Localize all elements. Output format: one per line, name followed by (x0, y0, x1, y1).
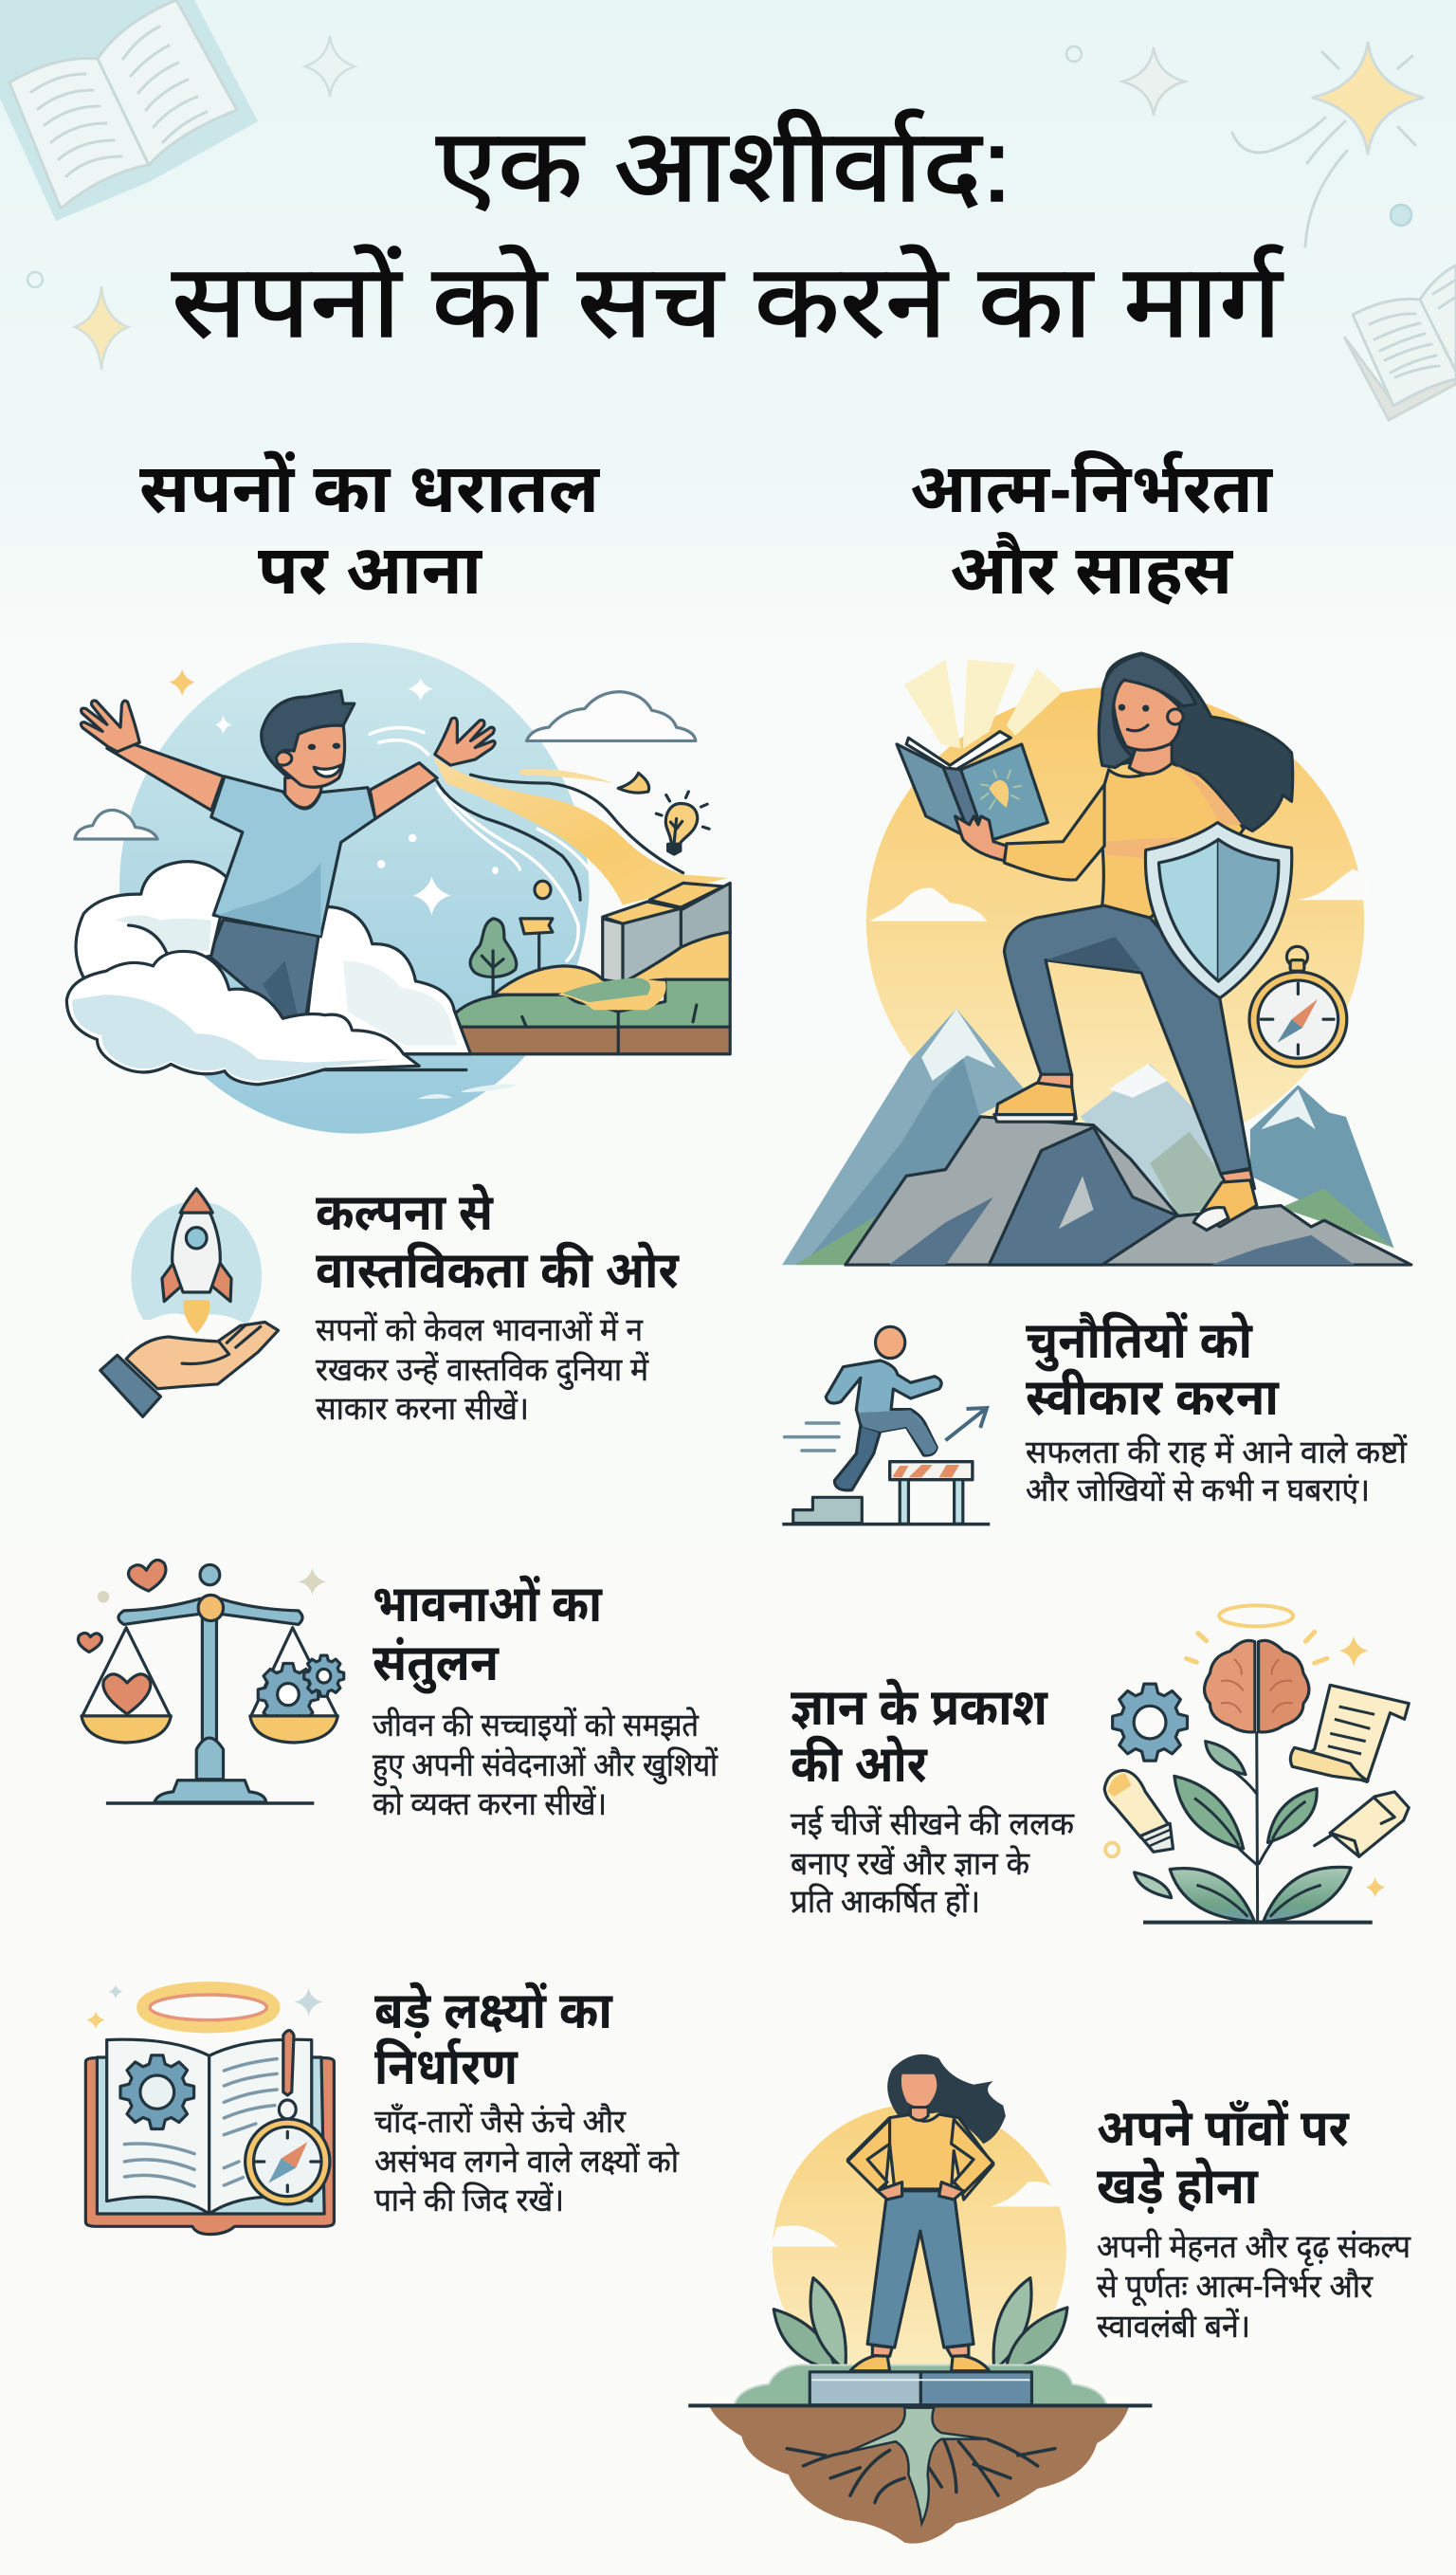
text: accepting challenges: और जोखियों से कभी न घबराएं। (1026, 1471, 1370, 1508)
sun (866, 687, 1364, 1157)
icon: faded open book top left (0, 0, 258, 221)
text: toward the light of knowledge: की ओर (791, 1735, 928, 1793)
text: imagination to reality (316, 1183, 680, 1427)
pen (283, 2031, 294, 2095)
text: setting big goals (374, 1981, 680, 2219)
icon: open book with gear, halo and compass (85, 1984, 334, 2235)
page stacks (97, 2057, 324, 2214)
icon: yellow sparkle (1312, 42, 1424, 155)
base (155, 1738, 266, 1802)
arm (1004, 784, 1104, 880)
heading: left column (139, 450, 601, 609)
man's pants (209, 920, 318, 1022)
back left mountain (782, 1009, 1026, 1265)
icon: brain plant with gear, bulb and scrolls (1104, 1605, 1409, 1923)
sparkle stars (216, 678, 450, 915)
icon: shooting star trails (1232, 52, 1415, 247)
sun circle (773, 2104, 1066, 2400)
text: balance of emotions: संतुलन (373, 1634, 500, 1695)
rocket body (173, 1189, 220, 1292)
roots (787, 2408, 1055, 2524)
text: balance of emotions: जीवन की सच्चाइयों को समझते (373, 1707, 700, 1744)
text: setting big goals: चाँद-तारों जैसे ऊंचे और (374, 2103, 627, 2140)
text: accepting challenges: स्वीकार करना (1026, 1368, 1280, 1426)
back leg (834, 1425, 881, 1490)
neck and arms (81, 701, 495, 819)
compass (246, 2100, 330, 2204)
hand (956, 816, 1007, 861)
illustration: man reaching from clouds to land (66, 643, 730, 1134)
icon: runner jumping over hurdle (782, 1326, 990, 1525)
stem (1221, 1732, 1283, 1922)
woman's back hair (1101, 653, 1293, 831)
icon: balance scale with heart and gears (78, 1560, 344, 1803)
left page (107, 2039, 209, 2214)
scroll (1299, 1685, 1409, 1781)
shoes (850, 2354, 990, 2371)
trousers shade (860, 1410, 937, 1454)
text: setting big goals: पाने की जिद रखें। (374, 2182, 564, 2219)
halo (143, 1988, 274, 2027)
icon: yellow sparkle left (75, 286, 128, 370)
water highlights (417, 1085, 518, 1099)
text: toward the light of knowledge: ज्ञान के प्रकाश (791, 1678, 1048, 1736)
backdrop circle (131, 1201, 262, 1351)
bushes (735, 2365, 1107, 2405)
text: toward the light of knowledge (791, 1678, 1075, 1920)
sand hill (623, 932, 730, 983)
text: standing on your own feet: स्वावलंबी बनें। (1097, 2308, 1250, 2345)
title (172, 108, 1283, 358)
text: standing on your own feet: खड़े होना (1097, 2157, 1259, 2215)
icon: teal dot (1391, 205, 1411, 226)
yellow star (170, 669, 194, 696)
rocket fins (162, 1260, 231, 1302)
rocket window (186, 1228, 207, 1249)
right page (209, 2039, 312, 2214)
text: imagination to reality: वास्तविकता की ओर (316, 1241, 680, 1299)
left cloud outline (75, 810, 157, 839)
gear on page (120, 2055, 194, 2129)
shoes (994, 1074, 1257, 1230)
small white dots (377, 834, 499, 874)
book cover (85, 2058, 334, 2235)
text: balance of emotions: भावनाओं का (373, 1575, 603, 1633)
text: standing on your own feet: से पूर्णतः आत्म-निर्भर और (1097, 2268, 1374, 2306)
icon: faded open book right (1344, 265, 1456, 420)
text: imagination to reality: रखकर उन्हें वास्तविक दुनिया में (316, 1351, 649, 1390)
right pan (250, 1628, 344, 1743)
man's head (262, 691, 355, 787)
text: standing on your own feet: अपनी मेहनत और दृढ़ संकल्प (1097, 2228, 1411, 2267)
green terrace (446, 979, 730, 1027)
icon: rocket on an open hand (100, 1189, 279, 1416)
hurdle board (890, 1462, 973, 1524)
trousers (867, 2191, 974, 2347)
text: toward the light of knowledge: नई चीजें सीखने की ललक (791, 1805, 1075, 1842)
arrow (945, 1408, 987, 1440)
back right mountain (1250, 1085, 1393, 1248)
head (876, 1326, 905, 1359)
heading: left column: सपनों का धरातल (139, 450, 601, 527)
body and arms (826, 1361, 941, 1455)
text: standing on your own feet (1097, 2099, 1411, 2345)
signpost (520, 881, 553, 992)
sparkles (109, 1984, 322, 2017)
leaves (1135, 1742, 1351, 1922)
text: balance of emotions: हुए अपनी संवेदनाओं और खुशियों (373, 1746, 719, 1786)
text: accepting challenges: चुनौतियों को (1026, 1311, 1253, 1373)
stream flowing to land (432, 756, 728, 905)
torso sweater (1098, 763, 1244, 918)
tree (470, 919, 517, 995)
rocket nose (180, 1189, 212, 1213)
icon: faded star (305, 36, 355, 97)
text: imagination to reality: सपनों को केवल भावनाओं में न (316, 1311, 644, 1348)
light rays (904, 660, 1063, 748)
text: imagination to reality: साकार करना सीखें। (316, 1390, 529, 1427)
left back cloud (76, 862, 229, 977)
sleeve cuff (100, 1355, 160, 1416)
torso (847, 2114, 993, 2200)
plants (774, 2278, 1067, 2370)
hands (878, 2182, 964, 2200)
text: setting big goals: बड़े लक्ष्यों का (374, 1981, 613, 2039)
lightbulb (656, 792, 709, 854)
icon: small ring left (27, 272, 43, 287)
steps (793, 1497, 862, 1524)
sky circle (119, 643, 590, 1134)
yellow drop (618, 773, 649, 793)
lightbulb (1104, 1770, 1170, 1837)
face (901, 2074, 937, 2107)
crossbeam (118, 1598, 302, 1624)
gear (1113, 1684, 1187, 1761)
back clouds (307, 906, 471, 1054)
title: एक आशीर्वाद: (436, 108, 1012, 223)
flame (183, 1300, 209, 1334)
rock peak (846, 1117, 1178, 1265)
floating hearts (78, 1560, 166, 1653)
stone blocks (603, 883, 730, 983)
yellow drifting wisp (519, 769, 614, 783)
hair (887, 2055, 1006, 2144)
stone plinth (810, 2372, 1031, 2405)
ground line (688, 2403, 1152, 2407)
decoration: top background doodles (0, 0, 1456, 420)
heading: right column (910, 450, 1274, 609)
post (202, 1616, 216, 1741)
illustration: woman standing firm with roots (688, 2055, 1152, 2544)
text: balance of emotions: को व्यक्त करना सीखें। (373, 1785, 607, 1822)
water line (325, 1054, 471, 1070)
heading: left column: पर आना (258, 533, 483, 609)
brown soil (446, 1027, 730, 1054)
text: standing on your own feet: अपने पाँवों पर (1097, 2099, 1350, 2157)
right rock (1102, 1206, 1411, 1265)
brain (1205, 1640, 1255, 1732)
clouds on sun (772, 2182, 1072, 2247)
ground line (782, 1523, 990, 1525)
left pan (82, 1628, 171, 1743)
speed lines (785, 1423, 839, 1451)
icon: faded ring (1066, 46, 1082, 62)
stream white wisps (370, 728, 590, 961)
top finial (200, 1564, 220, 1585)
ground line (1143, 1921, 1373, 1925)
text: accepting challenges: सफलता की राह में आने वाले कष्टों (1026, 1434, 1408, 1470)
back center mountain (1081, 1064, 1224, 1214)
compass (1249, 946, 1347, 1067)
sparkle and dot (98, 1567, 326, 1603)
hand (126, 1322, 279, 1389)
text lines on pages (124, 2059, 277, 2186)
title: सपनों को सच करने का मार्ग (172, 244, 1283, 358)
text: setting big goals: असंभव लगने वाले लक्ष्यों को (374, 2143, 680, 2180)
clouds over sun (869, 869, 1368, 922)
text: toward the light of knowledge: बनाए रखें और ज्ञान के (791, 1845, 1030, 1882)
right cloud outline (526, 692, 696, 740)
illustration: woman with book, shield and compass on mountain (782, 653, 1411, 1265)
leg raised and standing leg (1004, 905, 1250, 1174)
front cloud (66, 951, 419, 1085)
soil (710, 2407, 1129, 2544)
man's shirt (211, 776, 375, 937)
text: imagination to reality: कल्पना से (316, 1183, 494, 1241)
heading: right column: आत्म-निर्भरता (910, 450, 1274, 527)
stream edge lines (437, 775, 683, 900)
text: accepting challenges (1026, 1311, 1408, 1508)
rolled scroll (1330, 1792, 1409, 1856)
heading: right column: और साहस (950, 532, 1234, 609)
text: balance of emotions (373, 1575, 719, 1822)
open book (897, 732, 1047, 839)
shield (1145, 823, 1292, 998)
text: setting big goals: निर्धारण (374, 2037, 519, 2095)
icon: grey sparkle (1122, 47, 1185, 116)
exhaust smoke (124, 1313, 249, 1359)
text: toward the light of knowledge: प्रति आकर्षित हों। (791, 1883, 980, 1920)
neck and face (1099, 654, 1195, 774)
halo and sparkles (1219, 1605, 1293, 1626)
